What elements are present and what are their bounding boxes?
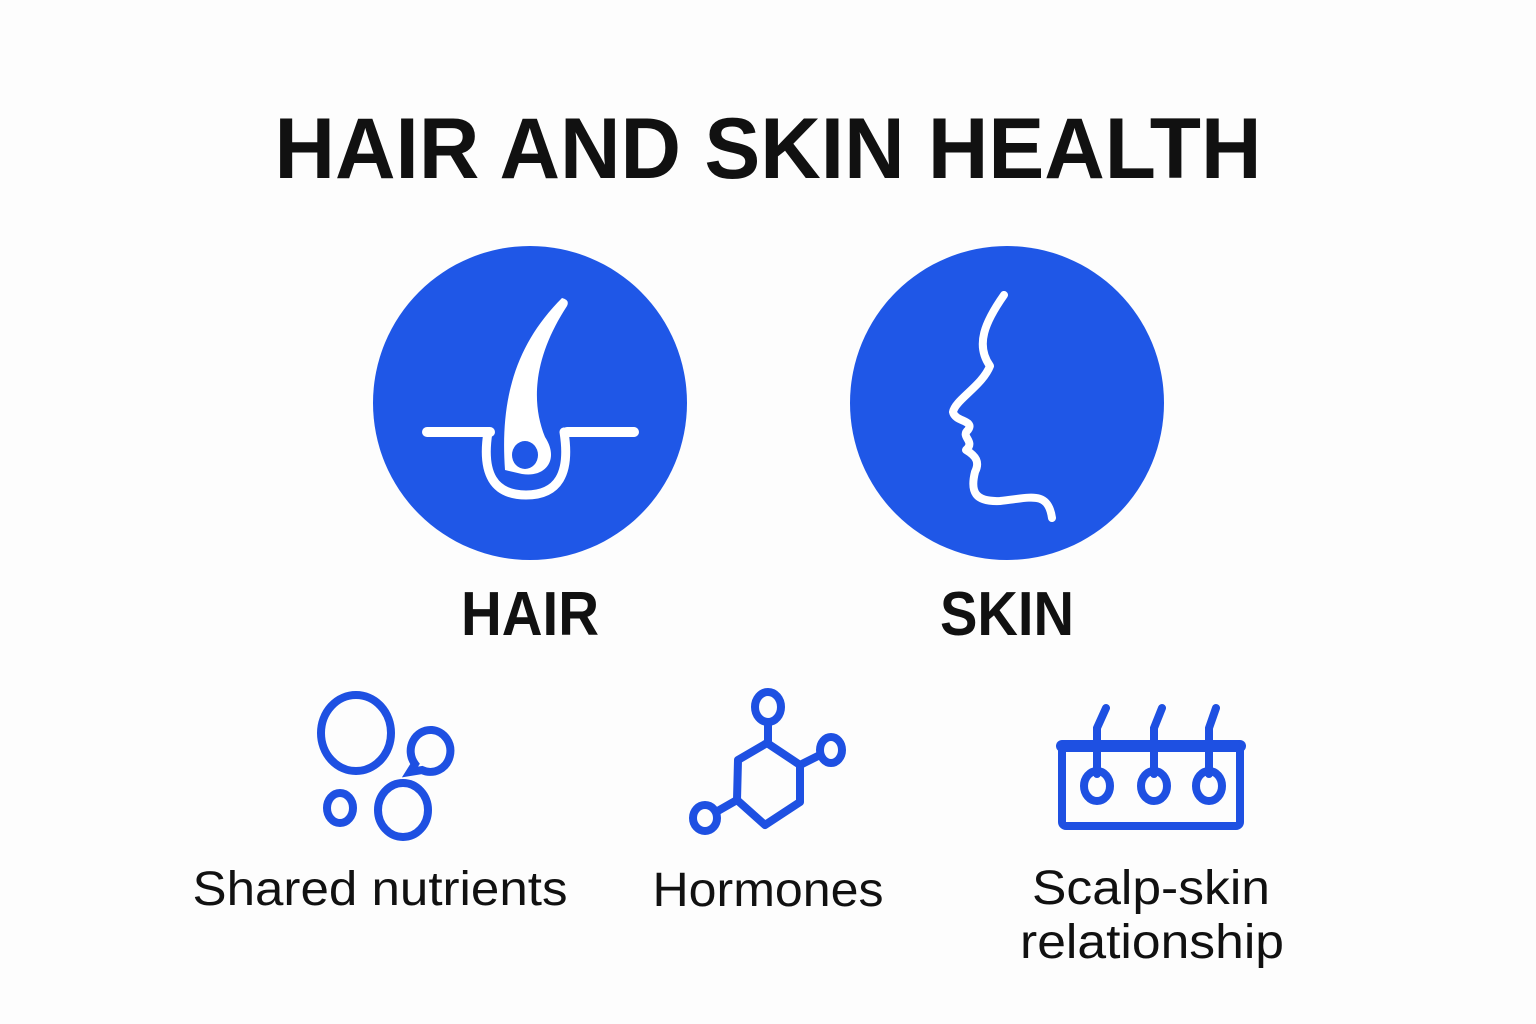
- icon: skin circle: [850, 246, 1164, 560]
- icon: hair circle: [373, 246, 687, 560]
- icon: scalp-skin: [1062, 708, 1240, 826]
- label: shared nutrients: Shared nutrients: [192, 863, 568, 916]
- label: scalp-skin relationship: Scalp-skin: [1032, 862, 1270, 915]
- icon: hormones molecule: [693, 692, 842, 831]
- label: scalp-skin relationship: relationship: [1020, 916, 1284, 969]
- label: skin: SKIN: [940, 580, 1074, 649]
- label: hormones: Hormones: [652, 864, 884, 917]
- icon: shared nutrients bubbles: [321, 695, 450, 837]
- title: HAIR AND SKIN HEALTH: [274, 101, 1262, 197]
- label: hair: HAIR: [461, 580, 599, 649]
- label: scalp-skin relationship: [1020, 862, 1284, 969]
